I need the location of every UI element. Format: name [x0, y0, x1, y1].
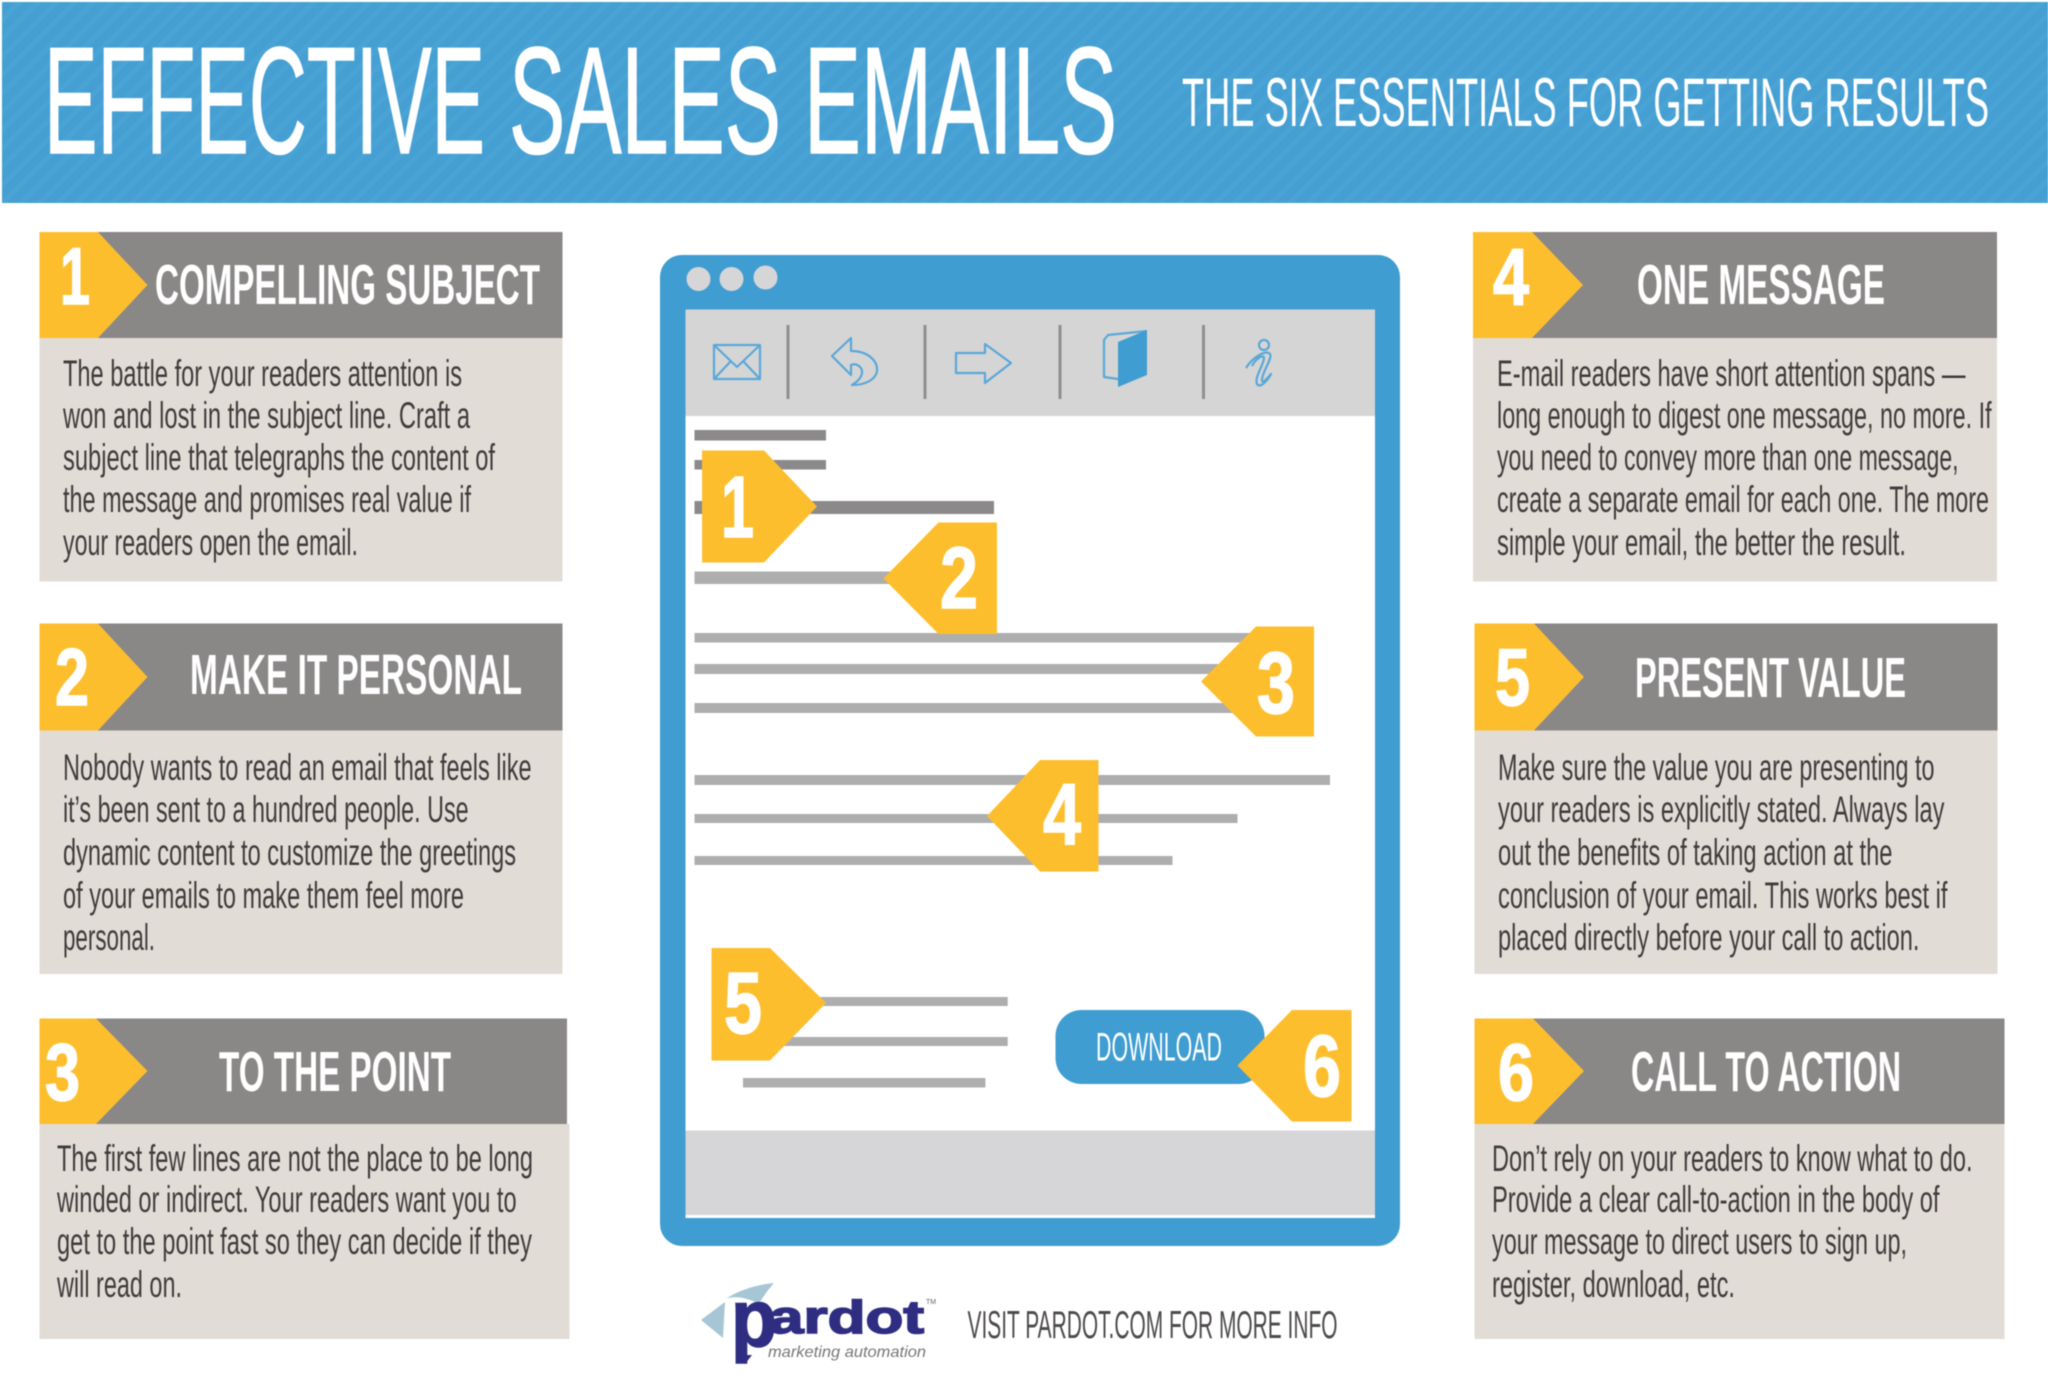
marker 1: 1	[721, 459, 754, 556]
body text: register, download, etc.	[1492, 1264, 1735, 1305]
marker 6: 6	[1303, 1018, 1341, 1115]
icon: envelope	[714, 345, 760, 379]
footer bar	[686, 1130, 1375, 1215]
marker 1	[702, 450, 817, 562]
body text	[63, 747, 532, 958]
marker 5	[712, 948, 826, 1060]
body text: it’s been sent to a hundred people. Use	[63, 789, 469, 830]
download button: DOWNLOAD	[1096, 1026, 1222, 1070]
number badge 3	[40, 1018, 148, 1124]
heading: COMPELLING SUBJECT	[155, 253, 540, 317]
body text: the message and promises real value if	[63, 479, 471, 520]
icon: reply arrow	[832, 338, 877, 385]
window control dots	[686, 266, 778, 291]
title: EFFECTIVE	[44, 16, 485, 186]
number badge 4: 4	[1493, 233, 1529, 323]
body text	[56, 1138, 533, 1305]
number badge 5: 5	[1495, 633, 1530, 723]
body text: personal.	[63, 917, 155, 958]
number badge 6: 6	[1498, 1028, 1534, 1118]
panel: 6 call to action	[1474, 1018, 2004, 1339]
number badge 2: 2	[55, 633, 89, 723]
body text: your readers open the email.	[63, 522, 358, 563]
title: EMAILS	[804, 16, 1117, 186]
logo: pardot: p	[731, 1274, 777, 1364]
body text: won and lost in the subject line. Craft a	[62, 395, 470, 436]
body text	[62, 353, 495, 563]
panel: 2 make it personal	[40, 624, 562, 974]
body text: The first few lines are not the place to be long	[57, 1138, 533, 1179]
number badge 6	[1474, 1018, 1584, 1124]
body text	[1498, 747, 1948, 958]
panel: 1 compelling subject	[40, 232, 562, 582]
heading: MAKE IT PERSONAL	[190, 643, 522, 707]
number badge 1	[40, 232, 148, 338]
number badge 3: 3	[45, 1028, 80, 1118]
marker 4	[987, 760, 1098, 872]
body text: The battle for your readers attention is	[63, 353, 462, 394]
body text: will read on.	[56, 1264, 182, 1305]
icon: info	[1246, 340, 1271, 385]
toolbar	[686, 310, 1375, 416]
window frame	[660, 255, 1400, 1246]
logo: pardot	[701, 1274, 936, 1364]
body text: of your emails to make them feel more	[63, 875, 464, 916]
number badge 1: 1	[60, 232, 90, 322]
placeholder header lines	[694, 430, 994, 514]
heading: TO THE POINT	[219, 1040, 451, 1104]
header banner	[2, 2, 2048, 203]
marker 4: 4	[1043, 766, 1081, 863]
body text: dynamic content to customize the greetings	[63, 832, 516, 873]
panel: 3 to the point	[40, 1018, 570, 1339]
panel: 4 one message	[1473, 232, 1997, 582]
marker 2	[884, 522, 997, 634]
body text	[1492, 1138, 1972, 1305]
marker 5: 5	[724, 955, 762, 1052]
number badge 5	[1474, 624, 1584, 730]
marker 3	[1201, 626, 1314, 736]
number badge 2	[40, 624, 148, 730]
logo: pardot: ardot	[769, 1291, 924, 1343]
icon: open book	[1104, 330, 1147, 387]
marker 6	[1238, 1010, 1352, 1122]
logo: pardot: marketing automation	[768, 1344, 926, 1361]
panel: 5 present value	[1474, 624, 1998, 974]
body text: winded or indirect. Your readers want you to	[56, 1179, 517, 1220]
footer call to action text: VISIT PARDOT.COM FOR MORE INFO	[968, 1304, 1338, 1347]
body text: subject line that telegraphs the content of	[63, 437, 495, 478]
title: SALES	[509, 16, 781, 186]
panel: email window mockup	[660, 255, 1400, 1246]
number badge 4	[1473, 232, 1583, 338]
marker 3: 3	[1257, 635, 1295, 732]
placeholder text lines	[694, 572, 1330, 1088]
body text: get to the point fast so they can decide if they	[57, 1221, 532, 1262]
logo: pardot: TM	[926, 1299, 936, 1306]
marker 2: 2	[940, 530, 978, 627]
download button	[1056, 1010, 1264, 1084]
body text	[1497, 353, 1992, 563]
email body area	[686, 416, 1375, 1218]
body text: Nobody wants to read an email that feels like	[63, 747, 532, 788]
icon: forward arrow	[956, 344, 1011, 383]
